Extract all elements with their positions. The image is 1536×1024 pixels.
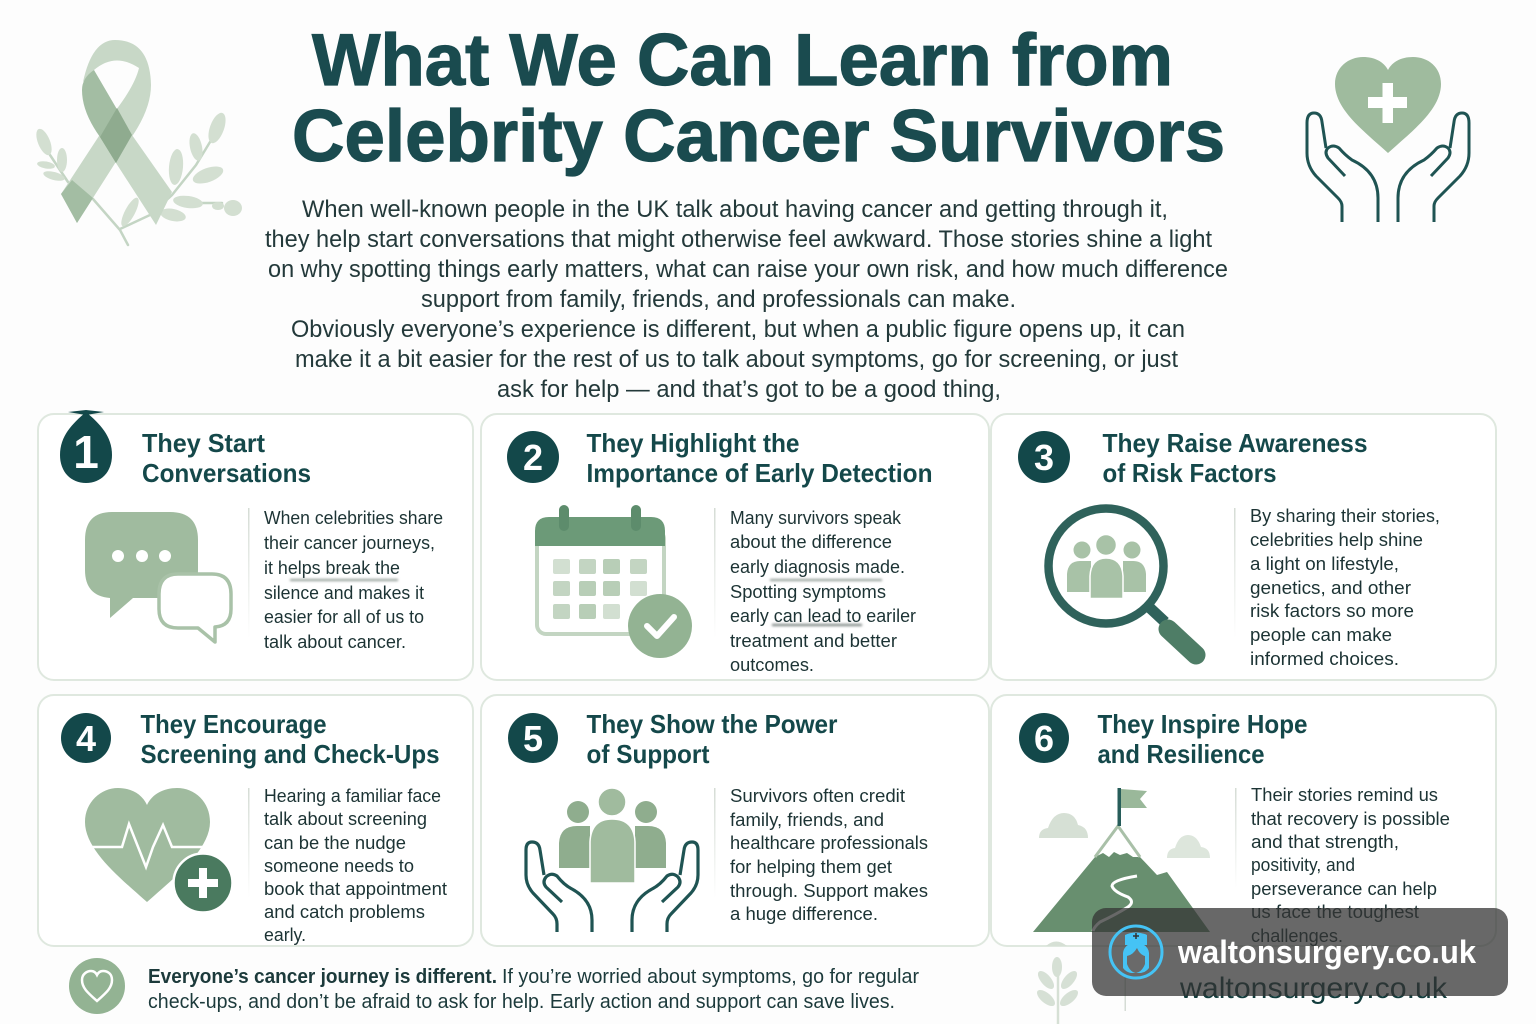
body text: and that strength, bbox=[1251, 831, 1399, 852]
footer website text: waltonsurgery.co.uk bbox=[1179, 972, 1448, 1005]
body text: informed choices. bbox=[1250, 648, 1399, 669]
body text: Spotting symptoms bbox=[730, 581, 886, 602]
icon: footer heart badge bbox=[69, 958, 125, 1014]
icon: calendar with check bbox=[535, 505, 692, 658]
body text: for helping them get bbox=[730, 856, 892, 877]
number badge 5 bbox=[508, 713, 558, 763]
body text: book that appointment bbox=[264, 878, 447, 899]
body text: treatment and better bbox=[730, 630, 897, 651]
number badge 6: 6 bbox=[1034, 718, 1054, 759]
intro paragraph: support from family, friends, and professionals can make. bbox=[421, 286, 1016, 313]
body text: their cancer journeys, bbox=[264, 532, 435, 553]
icon: mountain with flag and clouds bbox=[1033, 788, 1210, 932]
number badge 4: 4 bbox=[76, 718, 96, 759]
watermark badge bbox=[1092, 908, 1508, 996]
intro paragraph: they help start conversations that might otherwise feel awkward. Those stories shine a light bbox=[265, 226, 1212, 253]
body text: Survivors often credit bbox=[730, 785, 905, 806]
intro paragraph: ask for help — and that’s got to be a good thing, bbox=[497, 376, 1001, 403]
body text: talk about screening bbox=[264, 808, 427, 829]
heading: and Resilience bbox=[1098, 739, 1264, 769]
body text bbox=[730, 785, 928, 924]
panel: 3 They Raise Awareness of Risk Factors bbox=[991, 414, 1496, 680]
heading: Importance of Early Detection bbox=[586, 458, 932, 488]
heading: They Show the Power bbox=[586, 709, 838, 739]
body text: Hearing a familiar face bbox=[264, 785, 441, 806]
number badge 3 bbox=[1018, 431, 1070, 483]
footer note: If you’re worried about symptoms, go for regular bbox=[502, 966, 919, 988]
footer note: check-ups, and don’t be afraid to ask for help. Early action and support can save lives. bbox=[148, 991, 895, 1013]
heading: They Raise Awareness bbox=[1102, 428, 1368, 458]
panel: 2 They Highlight the Importance of Early Detection bbox=[481, 414, 989, 680]
heading bbox=[140, 709, 440, 769]
heading: of Risk Factors bbox=[1102, 458, 1276, 488]
body text bbox=[264, 785, 447, 945]
icon: magnifier with people bbox=[1048, 508, 1196, 655]
intro paragraph: on why spotting things early matters, what can raise your own risk, and how much difference bbox=[268, 256, 1228, 283]
heading: They Encourage bbox=[140, 709, 326, 739]
number badge 6 bbox=[1019, 713, 1069, 763]
icon: heart held by hands bbox=[1307, 57, 1469, 222]
body text: positivity, and bbox=[1251, 854, 1355, 875]
body text: When celebrities share bbox=[264, 507, 443, 528]
body text: easier for all of us to bbox=[264, 606, 424, 627]
heading: Conversations bbox=[142, 458, 311, 488]
body text: perseverance can help bbox=[1251, 878, 1437, 899]
heading: They Inspire Hope bbox=[1098, 709, 1308, 739]
icon: heart with pulse and plus bbox=[85, 788, 232, 912]
intro paragraph: make it a bit easier for the rest of us to talk about symptoms, go for screening, or just bbox=[295, 346, 1178, 373]
icon: nurse logo bbox=[1110, 926, 1162, 978]
title: Celebrity Cancer Survivors bbox=[292, 96, 1225, 177]
footer note: Everyone’s cancer journey is different. bbox=[148, 966, 497, 988]
intro paragraph: When well-known people in the UK talk about having cancer and getting through it, bbox=[302, 196, 1168, 223]
heading: Screening and Check-Ups bbox=[140, 739, 440, 769]
number badge 1 bbox=[60, 410, 112, 483]
heading: They Highlight the bbox=[586, 428, 800, 458]
body text: risk factors so more bbox=[1250, 600, 1414, 621]
body text: challenges. bbox=[1251, 925, 1343, 946]
body text: a light on lifestyle, bbox=[1250, 553, 1399, 574]
body text: it helps break the bbox=[264, 557, 400, 578]
body text: healthcare professionals bbox=[730, 832, 928, 853]
icon: people held by hands bbox=[526, 788, 698, 932]
body text: early. bbox=[264, 924, 306, 945]
heading bbox=[586, 709, 838, 769]
body text: By sharing their stories, bbox=[1250, 505, 1440, 526]
body text bbox=[264, 507, 443, 652]
body text: early can lead to eariler bbox=[730, 605, 916, 626]
body text: talk about cancer. bbox=[264, 631, 406, 652]
body text: celebrities help shine bbox=[1250, 529, 1423, 550]
number badge 5: 5 bbox=[523, 718, 543, 759]
body text: people can make bbox=[1250, 624, 1392, 645]
heading: of Support bbox=[586, 739, 710, 769]
body text: silence and makes it bbox=[264, 582, 424, 603]
number badge 1: 1 bbox=[73, 426, 99, 478]
heading bbox=[1102, 428, 1368, 488]
number badge 2: 2 bbox=[523, 437, 543, 478]
panel: 1 They Start Conversations bbox=[38, 410, 473, 680]
icon: speech bubbles bbox=[85, 512, 231, 642]
intro paragraph: Obviously everyone’s experience is different, but when a public figure opens up, it can bbox=[291, 316, 1185, 343]
body text: can be the nudge bbox=[264, 832, 406, 853]
body text: and catch problems bbox=[264, 901, 425, 922]
panel: 4 They Encourage Screening and Check-Ups bbox=[38, 695, 473, 946]
body text: Their stories remind us bbox=[1251, 784, 1438, 805]
icon: awareness ribbon with leaves bbox=[33, 40, 242, 245]
body text bbox=[1251, 784, 1450, 946]
panel: 6 They Inspire Hope and Resilience bbox=[991, 695, 1496, 946]
title: What We Can Learn from bbox=[312, 20, 1173, 101]
number badge 3: 3 bbox=[1034, 437, 1054, 478]
body text: genetics, and other bbox=[1250, 577, 1411, 598]
icon: footer plant bbox=[1034, 942, 1081, 1024]
body text: that recovery is possible bbox=[1251, 808, 1450, 829]
heading bbox=[586, 428, 932, 488]
body text: Many survivors speak bbox=[730, 507, 902, 528]
panel: 5 They Show the Power of Support bbox=[481, 695, 989, 946]
body text bbox=[1250, 505, 1440, 669]
body text: a huge difference. bbox=[730, 903, 878, 924]
body text: us face the toughest bbox=[1251, 901, 1419, 922]
title bbox=[292, 20, 1225, 177]
body text bbox=[730, 507, 916, 675]
body text: about the difference bbox=[730, 531, 892, 552]
intro paragraph bbox=[265, 196, 1228, 403]
body text: through. Support makes bbox=[730, 880, 928, 901]
body text: early diagnosis made. bbox=[730, 556, 905, 577]
number badge 4 bbox=[61, 713, 111, 763]
heading bbox=[142, 428, 311, 488]
number badge 2 bbox=[507, 431, 559, 483]
footer note bbox=[148, 966, 919, 1013]
watermark badge: waltonsurgery.co.uk bbox=[1177, 934, 1476, 970]
body text: someone needs to bbox=[264, 855, 414, 876]
heading: They Start bbox=[142, 428, 265, 458]
body text: outcomes. bbox=[730, 654, 814, 675]
heading bbox=[1098, 709, 1308, 769]
body text: family, friends, and bbox=[730, 809, 884, 830]
